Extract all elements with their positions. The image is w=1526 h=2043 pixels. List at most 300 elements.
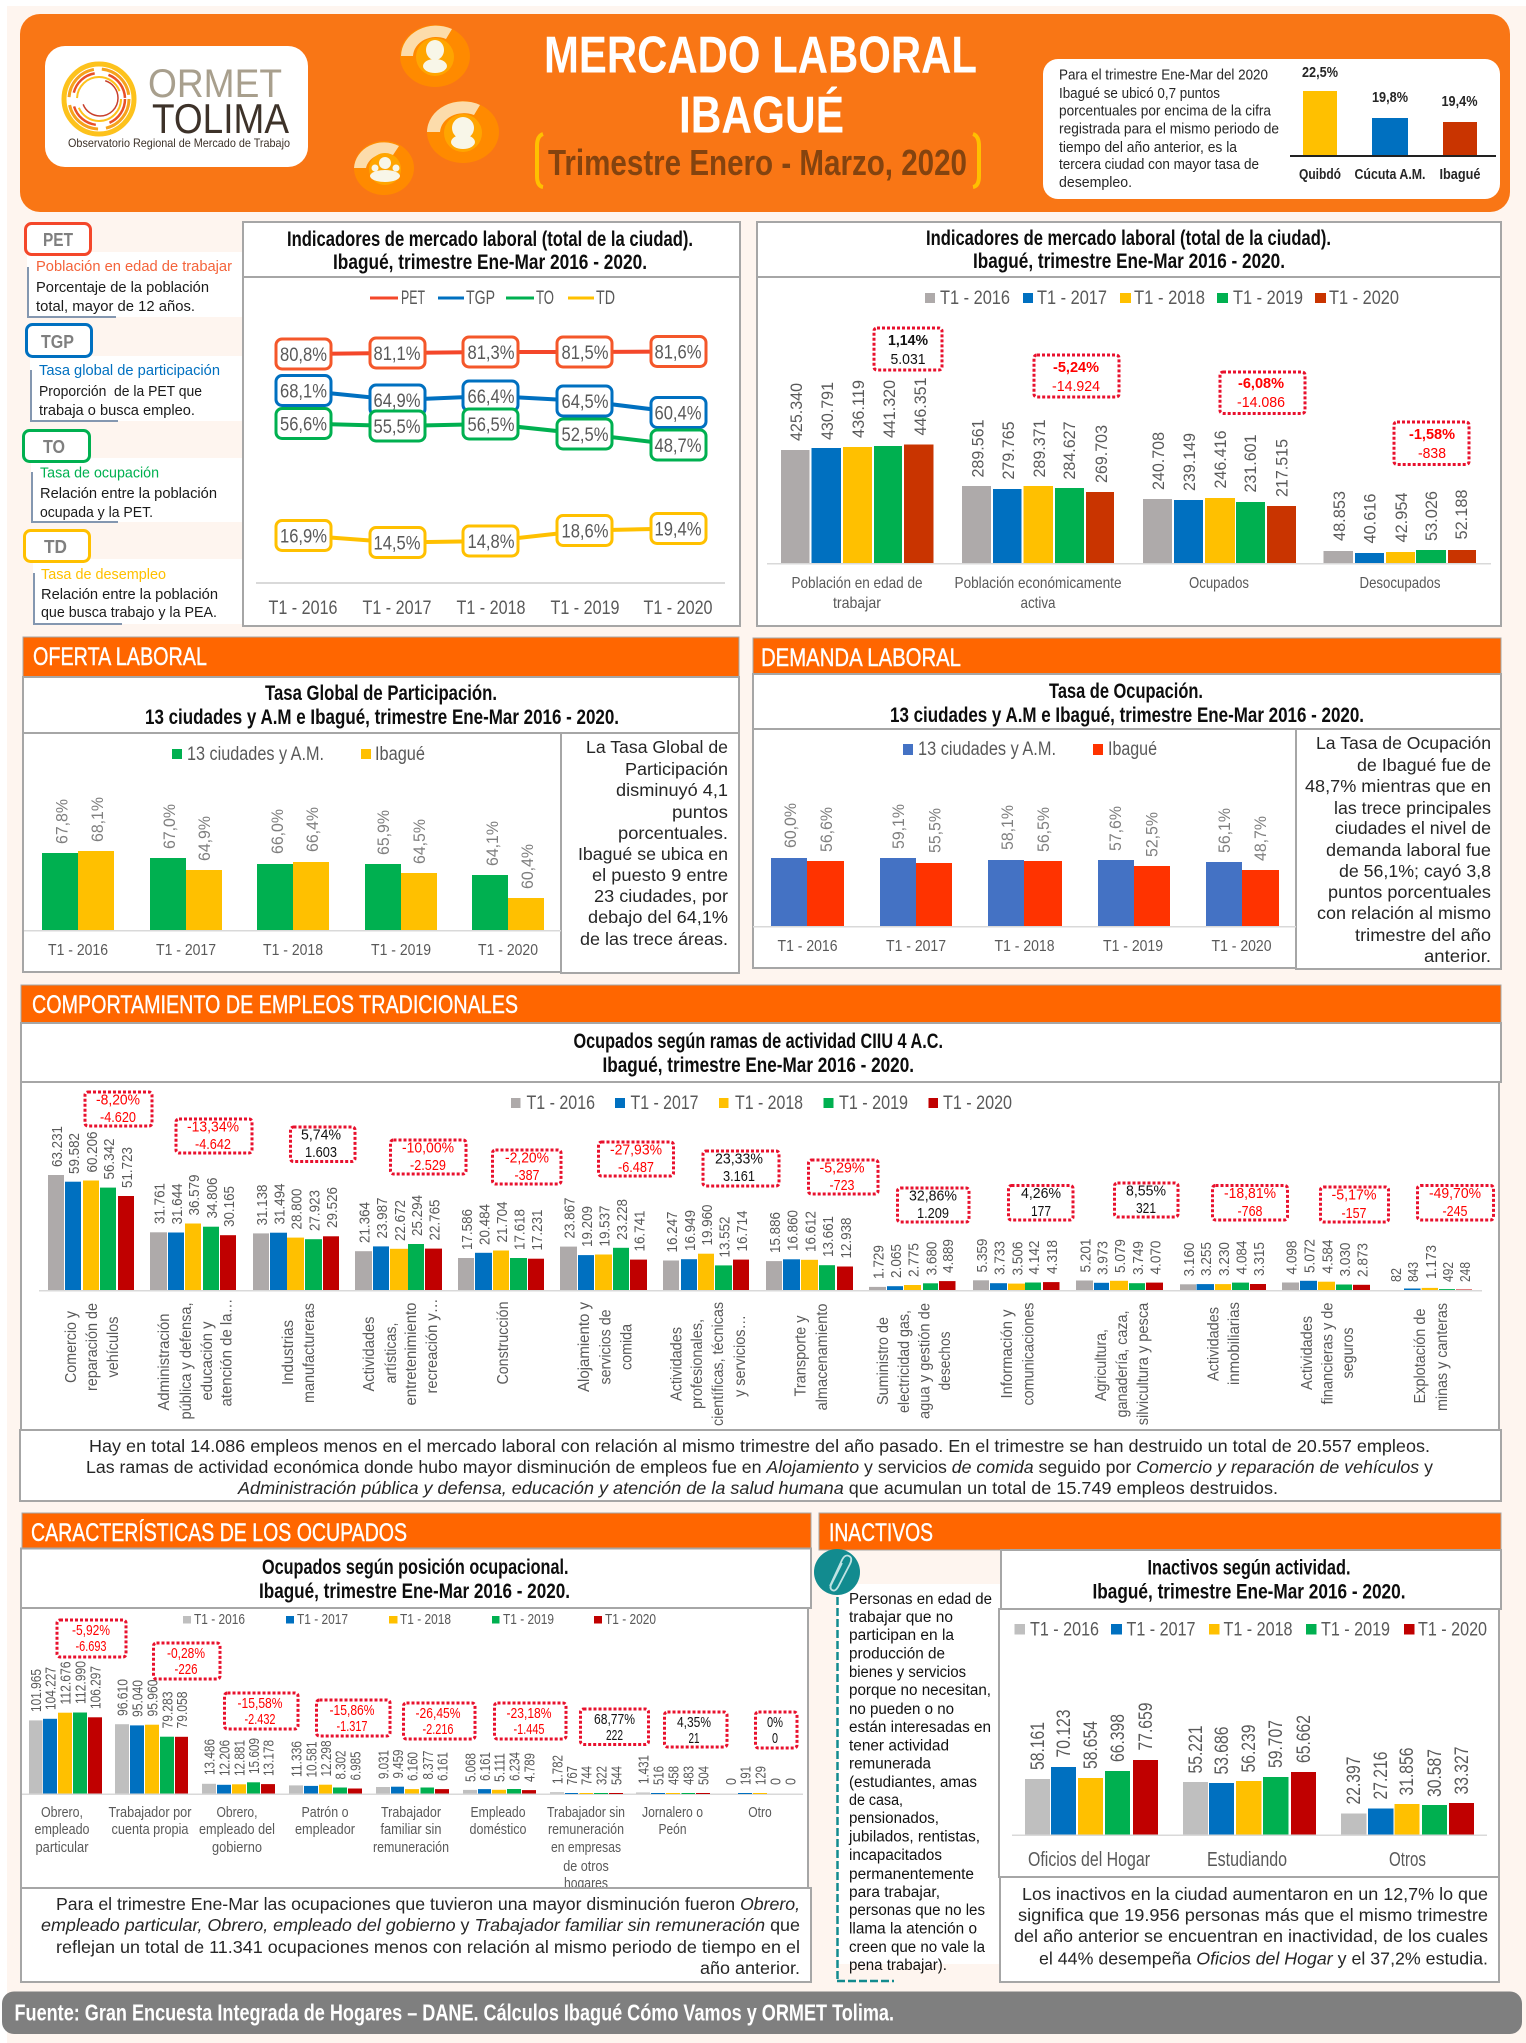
category labels: empleado del	[199, 1821, 275, 1838]
text block: creen que no vale la	[849, 1939, 985, 1956]
legend	[172, 744, 425, 765]
legend: T1 - 2019	[1233, 288, 1303, 309]
data labels: 96.610	[114, 1679, 132, 1716]
callouts: 3.161	[723, 1168, 755, 1185]
legend: T1 - 2019	[839, 1093, 908, 1114]
data labels: 58,1%	[998, 805, 1017, 850]
text: conclusión empleos	[20, 1430, 1501, 1501]
callouts: -768	[1238, 1203, 1262, 1220]
category labels: hogares	[564, 1875, 608, 1892]
data labels: 56.239	[1239, 1724, 1260, 1772]
data labels: 9.031	[376, 1750, 392, 1779]
text: conclusión ocupaciones: año anterior.	[700, 1958, 800, 1978]
category labels: T1 - 2019	[371, 942, 431, 959]
category labels: T1 - 2017	[156, 942, 216, 959]
category labels: particular	[36, 1839, 88, 1856]
heading bar	[21, 985, 1501, 1023]
category labels: Peón	[658, 1821, 686, 1838]
data labels: 4.070	[1148, 1240, 1164, 1274]
data labels: 64,5%	[410, 819, 429, 864]
data labels: 246.416	[1211, 430, 1230, 488]
data labels: 446.351	[911, 378, 930, 436]
data labels: 16.860	[784, 1210, 802, 1251]
text block: tener actividad	[849, 1738, 949, 1754]
data labels: 436.119	[849, 380, 868, 438]
text block: bienes y servicios	[849, 1664, 966, 1681]
sidebar: definición inactivos	[814, 1549, 1000, 1982]
data labels: 1.729	[870, 1245, 888, 1279]
legend: T1 - 2019	[1321, 1620, 1390, 1640]
legend	[1014, 1620, 1487, 1640]
data labels: 4.584	[1320, 1240, 1336, 1274]
bar chart	[753, 803, 1296, 955]
data labels: 5.068	[462, 1753, 480, 1782]
data labels: 17.586	[459, 1209, 476, 1250]
data labels: 20.484	[476, 1204, 494, 1245]
callouts: 5.031	[890, 351, 926, 368]
text: tasa global: Ibagué se ubica en	[578, 844, 728, 864]
category labels: gobierno	[212, 1839, 262, 1856]
legend: PET	[401, 288, 425, 309]
data labels: 63.231	[49, 1126, 66, 1167]
callouts: -5,29%	[820, 1160, 864, 1176]
text block: pena trabajar).	[849, 1957, 947, 1974]
category labels: servicios de	[598, 1309, 614, 1384]
data labels: 4.318	[1044, 1240, 1061, 1274]
data labels	[787, 378, 1471, 544]
data labels: 40.616	[1360, 494, 1380, 544]
data labels: 13.552	[716, 1216, 734, 1258]
data labels: 60.206	[84, 1132, 101, 1172]
callouts: -15,58%	[238, 1695, 282, 1712]
chart title	[1092, 1556, 1406, 1604]
data labels: 67,0%	[160, 804, 179, 849]
text block: jubilados, rentistas,	[848, 1828, 980, 1846]
category labels: Agricultura,	[1093, 1329, 1110, 1401]
data labels: 64,1%	[483, 821, 502, 866]
series: TO: 56,5%	[468, 415, 515, 436]
callouts	[85, 1092, 1494, 1222]
text: tasa de ocupación: anterior.	[1424, 946, 1491, 966]
category labels: seguros	[1340, 1328, 1357, 1378]
data labels: 843	[1405, 1262, 1422, 1282]
data labels: 17.231	[529, 1210, 546, 1250]
category labels: T1 - 2020	[1212, 938, 1272, 955]
data labels: 66.398	[1108, 1714, 1129, 1762]
data labels: 2.065	[888, 1244, 905, 1278]
data labels: 4.789	[522, 1753, 538, 1782]
data labels: 112.990	[72, 1661, 90, 1704]
callouts: 21	[688, 1730, 700, 1747]
data labels: 21.364	[356, 1202, 374, 1243]
legend	[183, 1611, 656, 1628]
category labels: y servicios…	[732, 1315, 749, 1397]
data labels: 269.703	[1092, 425, 1111, 483]
callouts: 8,55%	[1126, 1182, 1166, 1200]
data labels: 322	[594, 1766, 610, 1785]
data labels: 3.030	[1337, 1242, 1354, 1276]
definition: TO: Tasa de ocupación	[40, 466, 159, 482]
category labels: trabajar	[833, 595, 882, 612]
chart title: Ibagué, trimestre Ene-Mar 2016 - 2020.	[1092, 1580, 1406, 1604]
callouts: -6.487	[618, 1159, 654, 1176]
data labels: 5.359	[974, 1238, 991, 1272]
series: TO: 56,6%	[280, 414, 327, 436]
callouts: -10,00%	[402, 1140, 454, 1156]
category labels: manufactureras	[301, 1303, 318, 1403]
heading bar: CARACTERÍSTICAS DE LOS OCUPADOS	[31, 1518, 407, 1547]
category labels: T1 - 2016	[48, 942, 108, 959]
data labels: 112.676	[58, 1662, 74, 1704]
series: PET	[276, 336, 706, 369]
category labels: Comercio y	[63, 1311, 80, 1383]
callouts: -245	[1442, 1203, 1468, 1220]
data labels: 17.618	[512, 1209, 528, 1250]
category labels: pública y defensa,	[178, 1302, 195, 1420]
data labels: 248	[1457, 1262, 1474, 1282]
series: TO: 48,7%	[654, 436, 702, 457]
data labels: 28.800	[288, 1188, 306, 1230]
text: tasa global: disminuyó 4,1	[616, 780, 728, 800]
data labels: 31.761	[152, 1183, 168, 1224]
category labels: Suministro de	[875, 1317, 892, 1405]
text block: personas que no les	[849, 1902, 985, 1919]
data labels: 4.098	[1284, 1240, 1300, 1274]
callouts: 177	[1031, 1203, 1051, 1220]
data labels: 425.340	[787, 383, 806, 441]
category labels: Industrias	[280, 1320, 297, 1385]
data labels: 59.582	[66, 1133, 83, 1174]
chart title	[259, 1556, 570, 1603]
data labels: 9.459	[390, 1750, 407, 1778]
data labels: 52,5%	[1142, 812, 1162, 857]
data labels: 19.537	[596, 1206, 614, 1246]
bar chart: posición ocupacional	[22, 1620, 803, 1892]
heading: Ibagué, trimestre Ene-Mar 2016 - 2020.	[973, 250, 1285, 273]
text: tasa de ocupación: de Ibagué fue de	[1357, 755, 1491, 775]
data labels	[1028, 1702, 1473, 1804]
panel: indicadores barras	[757, 222, 1501, 626]
data labels: 34.806	[204, 1178, 221, 1218]
series: TGP: 68,1%	[280, 382, 327, 402]
data labels: 22.765	[426, 1200, 444, 1240]
data labels: 95.960	[144, 1680, 162, 1716]
category labels: Trabajador	[381, 1804, 441, 1821]
series: TD: 14,8%	[468, 532, 515, 553]
data labels: 19.960	[699, 1204, 716, 1246]
legend	[903, 739, 1157, 760]
category labels: activa	[1020, 595, 1056, 612]
callouts: -838	[1418, 445, 1446, 462]
data labels: 6.161	[434, 1752, 452, 1781]
data labels: 217.515	[1272, 439, 1292, 497]
data labels: 23.228	[614, 1199, 631, 1240]
legend: Ibagué	[375, 744, 425, 765]
bar chart: ciudades: Ibagué	[1440, 167, 1480, 183]
data labels: 64,9%	[195, 816, 214, 861]
data labels: 129	[752, 1766, 770, 1785]
series: PET: 80,8%	[280, 345, 327, 366]
data labels: 12.206	[216, 1740, 234, 1776]
data labels: 3.749	[1130, 1241, 1147, 1275]
text: conclusión inactivos: el 44% desempeña Oficios del Hogar y el 37,2% estudia.	[1039, 1948, 1488, 1968]
legend: T1 - 2018	[1224, 1620, 1292, 1640]
heading bar: DEMANDA LABORAL	[761, 644, 961, 672]
definition: TO: TO	[43, 437, 65, 457]
header banner	[20, 14, 1510, 212]
category labels: T1 - 2016	[778, 938, 838, 955]
bar chart: ciudades	[1290, 65, 1496, 183]
line chart: T1 - 2016	[268, 598, 338, 619]
data labels: 3.160	[1181, 1242, 1198, 1276]
category labels: Actividades	[1299, 1316, 1316, 1390]
category labels: atención de la…	[218, 1298, 236, 1406]
series: TGP: 64,5%	[562, 392, 609, 413]
text: conclusión empleos: Administración pública y defensa, educación y atención de la salud humana que acumulan un total de 15.749 empleos destruidos.	[237, 1478, 1278, 1498]
category labels	[792, 575, 1440, 612]
callouts: -4.620	[100, 1109, 136, 1126]
callouts: 4,26%	[1021, 1185, 1061, 1202]
callouts: -0,28%	[167, 1645, 205, 1662]
icon: paperclip	[814, 1549, 860, 1595]
data labels: 231.601	[1241, 434, 1260, 492]
legend: T1 - 2017	[1126, 1620, 1196, 1640]
category labels: T1 - 2018	[994, 938, 1055, 955]
line chart	[256, 336, 725, 619]
callouts: -14.924	[1052, 378, 1100, 395]
category labels: Obrero,	[41, 1804, 83, 1821]
data labels: 66,0%	[268, 809, 287, 854]
category labels: Estudiando	[1207, 1849, 1287, 1871]
legend	[925, 288, 1399, 309]
text block: pensionados,	[849, 1810, 939, 1827]
data labels: 77.659	[1136, 1702, 1157, 1750]
data labels: 51.723	[119, 1147, 136, 1188]
definition: TD: TD	[44, 537, 67, 557]
callouts: -2.432	[244, 1711, 276, 1728]
panel: características de los ocupados	[21, 1513, 811, 1982]
logo: ORMET Tolima	[45, 46, 308, 167]
category labels: silvicultura y pesca	[1135, 1303, 1152, 1425]
category labels: financieras y de	[1320, 1302, 1336, 1404]
data labels	[28, 1661, 800, 1785]
line chart: T1 - 2019	[550, 598, 620, 619]
callouts: -23,18%	[506, 1705, 552, 1722]
text block: remunerada	[849, 1756, 931, 1772]
callouts: -157	[1342, 1205, 1366, 1222]
subtitle: Trimestre Enero - Marzo, 2020	[548, 142, 967, 183]
text: tasa de ocupación: trimestre del año	[1355, 925, 1491, 945]
category labels: Jornalero o	[642, 1804, 703, 1821]
data labels: 22.672	[392, 1200, 409, 1241]
series: TGP: 64,9%	[374, 391, 421, 412]
text: tasa de ocupación: 48,7% mientras que en	[1305, 776, 1491, 796]
title: IBAGUÉ	[679, 86, 844, 144]
category labels: Oficios del Hogar	[1028, 1849, 1150, 1871]
category labels: doméstico	[470, 1821, 526, 1838]
data labels: 56,6%	[817, 807, 836, 852]
category labels: Otro	[748, 1804, 772, 1821]
series: TGP	[276, 376, 706, 428]
series: TD: 14,5%	[374, 534, 421, 554]
category labels: inmobiliarias	[1226, 1302, 1243, 1385]
category labels: almacenamiento	[814, 1303, 831, 1410]
data labels: 13.178	[260, 1740, 278, 1776]
text block: tiempo del año anterior, es la	[1059, 140, 1238, 156]
data labels: 56,1%	[1215, 808, 1234, 853]
data labels: 3.315	[1251, 1242, 1268, 1276]
data labels: 240.708	[1149, 432, 1168, 490]
callouts: -1.445	[514, 1721, 544, 1738]
chart title: 13 ciudades y A.M e Ibagué, trimestre Ene-Mar 2016 - 2020.	[145, 706, 619, 729]
category labels: Construcción	[495, 1302, 512, 1384]
definition: TGP: Tasa global de participación	[39, 363, 220, 379]
heading	[926, 227, 1331, 273]
data labels: 289.371	[1030, 420, 1049, 478]
legend: 13 ciudades y A.M.	[918, 739, 1056, 760]
callouts: -49,70%	[1429, 1185, 1481, 1202]
series: PET: 81,1%	[374, 344, 421, 365]
category labels	[63, 1298, 1451, 1426]
data labels: 2.873	[1354, 1243, 1372, 1277]
definition: TD: Relación entre la población	[41, 587, 218, 603]
text block	[1059, 68, 1279, 191]
data labels: 106.297	[88, 1666, 104, 1709]
panel: definiciones	[24, 224, 242, 624]
legend: T1 - 2020	[605, 1611, 656, 1628]
series: TO	[276, 408, 706, 460]
callouts: 5,74%	[301, 1126, 341, 1144]
definition: TGP: trabaja o busca empleo.	[39, 403, 195, 419]
chart title: Ocupados según ramas de actividad CIIU 4 A.C.	[574, 1030, 943, 1053]
category labels: comunicaciones	[1020, 1302, 1038, 1406]
data labels	[781, 803, 1270, 861]
callouts: -6.693	[76, 1638, 106, 1655]
heading	[287, 228, 693, 274]
category labels: Actividades	[1206, 1307, 1222, 1381]
footer: fuente	[2, 1992, 1522, 2034]
data labels: 441.320	[880, 380, 899, 438]
data labels: 27.923	[306, 1190, 324, 1231]
data labels: 65,9%	[374, 810, 393, 855]
text: tasa global: 23 ciudades, por	[594, 886, 728, 906]
data labels: 767	[564, 1766, 581, 1785]
data labels: 31.494	[272, 1184, 288, 1224]
data labels: 12.881	[232, 1740, 248, 1776]
data labels: 1.173	[1423, 1245, 1440, 1279]
text block: incapacitados	[849, 1847, 942, 1864]
category labels: reparación de	[84, 1303, 101, 1391]
series: TD	[276, 514, 706, 558]
data labels: 458	[666, 1766, 682, 1785]
legend: T1 - 2017	[1037, 288, 1107, 309]
legend: Ibagué	[1108, 739, 1157, 760]
category labels: recreación y…	[424, 1298, 441, 1394]
logo: ORMET Tolima: ORMET	[148, 62, 282, 106]
legend: T1 - 2016	[940, 288, 1010, 309]
data labels: 29.526	[324, 1187, 341, 1228]
text: tasa global: La Tasa Global de	[586, 737, 728, 757]
legend: T1 - 2018	[735, 1093, 803, 1114]
data labels: 55.221	[1186, 1726, 1207, 1774]
text block: producción de	[849, 1646, 945, 1662]
heading bar: INACTIVOS	[829, 1519, 933, 1547]
data labels: 3.973	[1094, 1241, 1112, 1275]
category labels: Desocupados	[1360, 575, 1440, 592]
callouts: -5,24%	[1053, 359, 1099, 376]
category labels: cuenta propia	[112, 1821, 189, 1838]
data labels: 66,4%	[303, 807, 322, 852]
definition: TD	[24, 530, 242, 624]
legend: T1 - 2016	[526, 1093, 595, 1114]
data labels: 8.302	[332, 1750, 350, 1780]
icon: woman	[427, 101, 499, 163]
data labels: 1.431	[636, 1755, 652, 1784]
category labels: T1 - 2017	[886, 938, 946, 955]
definition: TGP: TGP	[41, 332, 74, 352]
data labels: 13.661	[820, 1216, 837, 1257]
chart title: Ibagué, trimestre Ene-Mar 2016 - 2020.	[602, 1054, 914, 1077]
callouts	[57, 1620, 797, 1748]
series: TO: 52,5%	[562, 425, 609, 446]
callouts: -2,20%	[505, 1150, 549, 1166]
data labels: 23.867	[562, 1198, 578, 1238]
callouts	[874, 328, 1469, 464]
series: TD: 19,4%	[654, 520, 702, 540]
category labels: Información y	[999, 1310, 1016, 1398]
callouts: 1,14%	[888, 332, 928, 349]
callouts: 4,35%	[677, 1714, 711, 1731]
text block: porque no necesitan,	[849, 1682, 991, 1699]
data labels: 5.111	[492, 1753, 508, 1782]
data labels: 239.149	[1180, 433, 1199, 491]
category labels	[34, 1804, 772, 1892]
data labels: 6.234	[506, 1752, 524, 1781]
text: tasa global: puntos	[672, 802, 728, 822]
data labels: 492	[1440, 1262, 1457, 1282]
legend: T1 - 2017	[297, 1611, 348, 1628]
category labels: de otros	[563, 1858, 609, 1875]
data labels: 101.965	[28, 1669, 45, 1712]
data labels: 59,1%	[889, 804, 908, 849]
data labels: 31.856	[1397, 1748, 1418, 1796]
text: conclusión ocupaciones: empleado particular, Obrero, empleado del gobierno y Trabajador familiar sin remuneración que	[41, 1915, 800, 1935]
bar chart: inactivos	[1012, 1702, 1487, 1871]
data labels: 430.791	[818, 382, 837, 440]
callouts: 68,77%	[594, 1711, 635, 1728]
data labels: 6.161	[477, 1752, 494, 1781]
bar chart	[24, 797, 561, 959]
text block: de casa,	[849, 1792, 903, 1809]
series: PET: 81,5%	[562, 343, 609, 364]
callouts: -27,93%	[610, 1142, 662, 1158]
legend: TO	[536, 288, 554, 309]
category labels: Población económicamente	[954, 575, 1122, 592]
callouts: -5,92%	[72, 1622, 110, 1639]
legend: T1 - 2020	[1329, 288, 1399, 309]
legend: T1 - 2020	[1418, 1620, 1487, 1640]
callouts: 0	[772, 1730, 778, 1747]
category labels: Actividades	[361, 1316, 378, 1392]
data labels	[52, 797, 537, 889]
category labels	[48, 942, 538, 959]
text: tasa global: de las trece áreas.	[580, 929, 728, 949]
callouts: 321	[1136, 1200, 1156, 1217]
category labels: Administración	[156, 1314, 173, 1410]
heading bar: OFERTA LABORAL	[33, 643, 207, 671]
category labels: Trabajador por	[108, 1804, 192, 1821]
series: PET: 81,3%	[468, 343, 515, 364]
